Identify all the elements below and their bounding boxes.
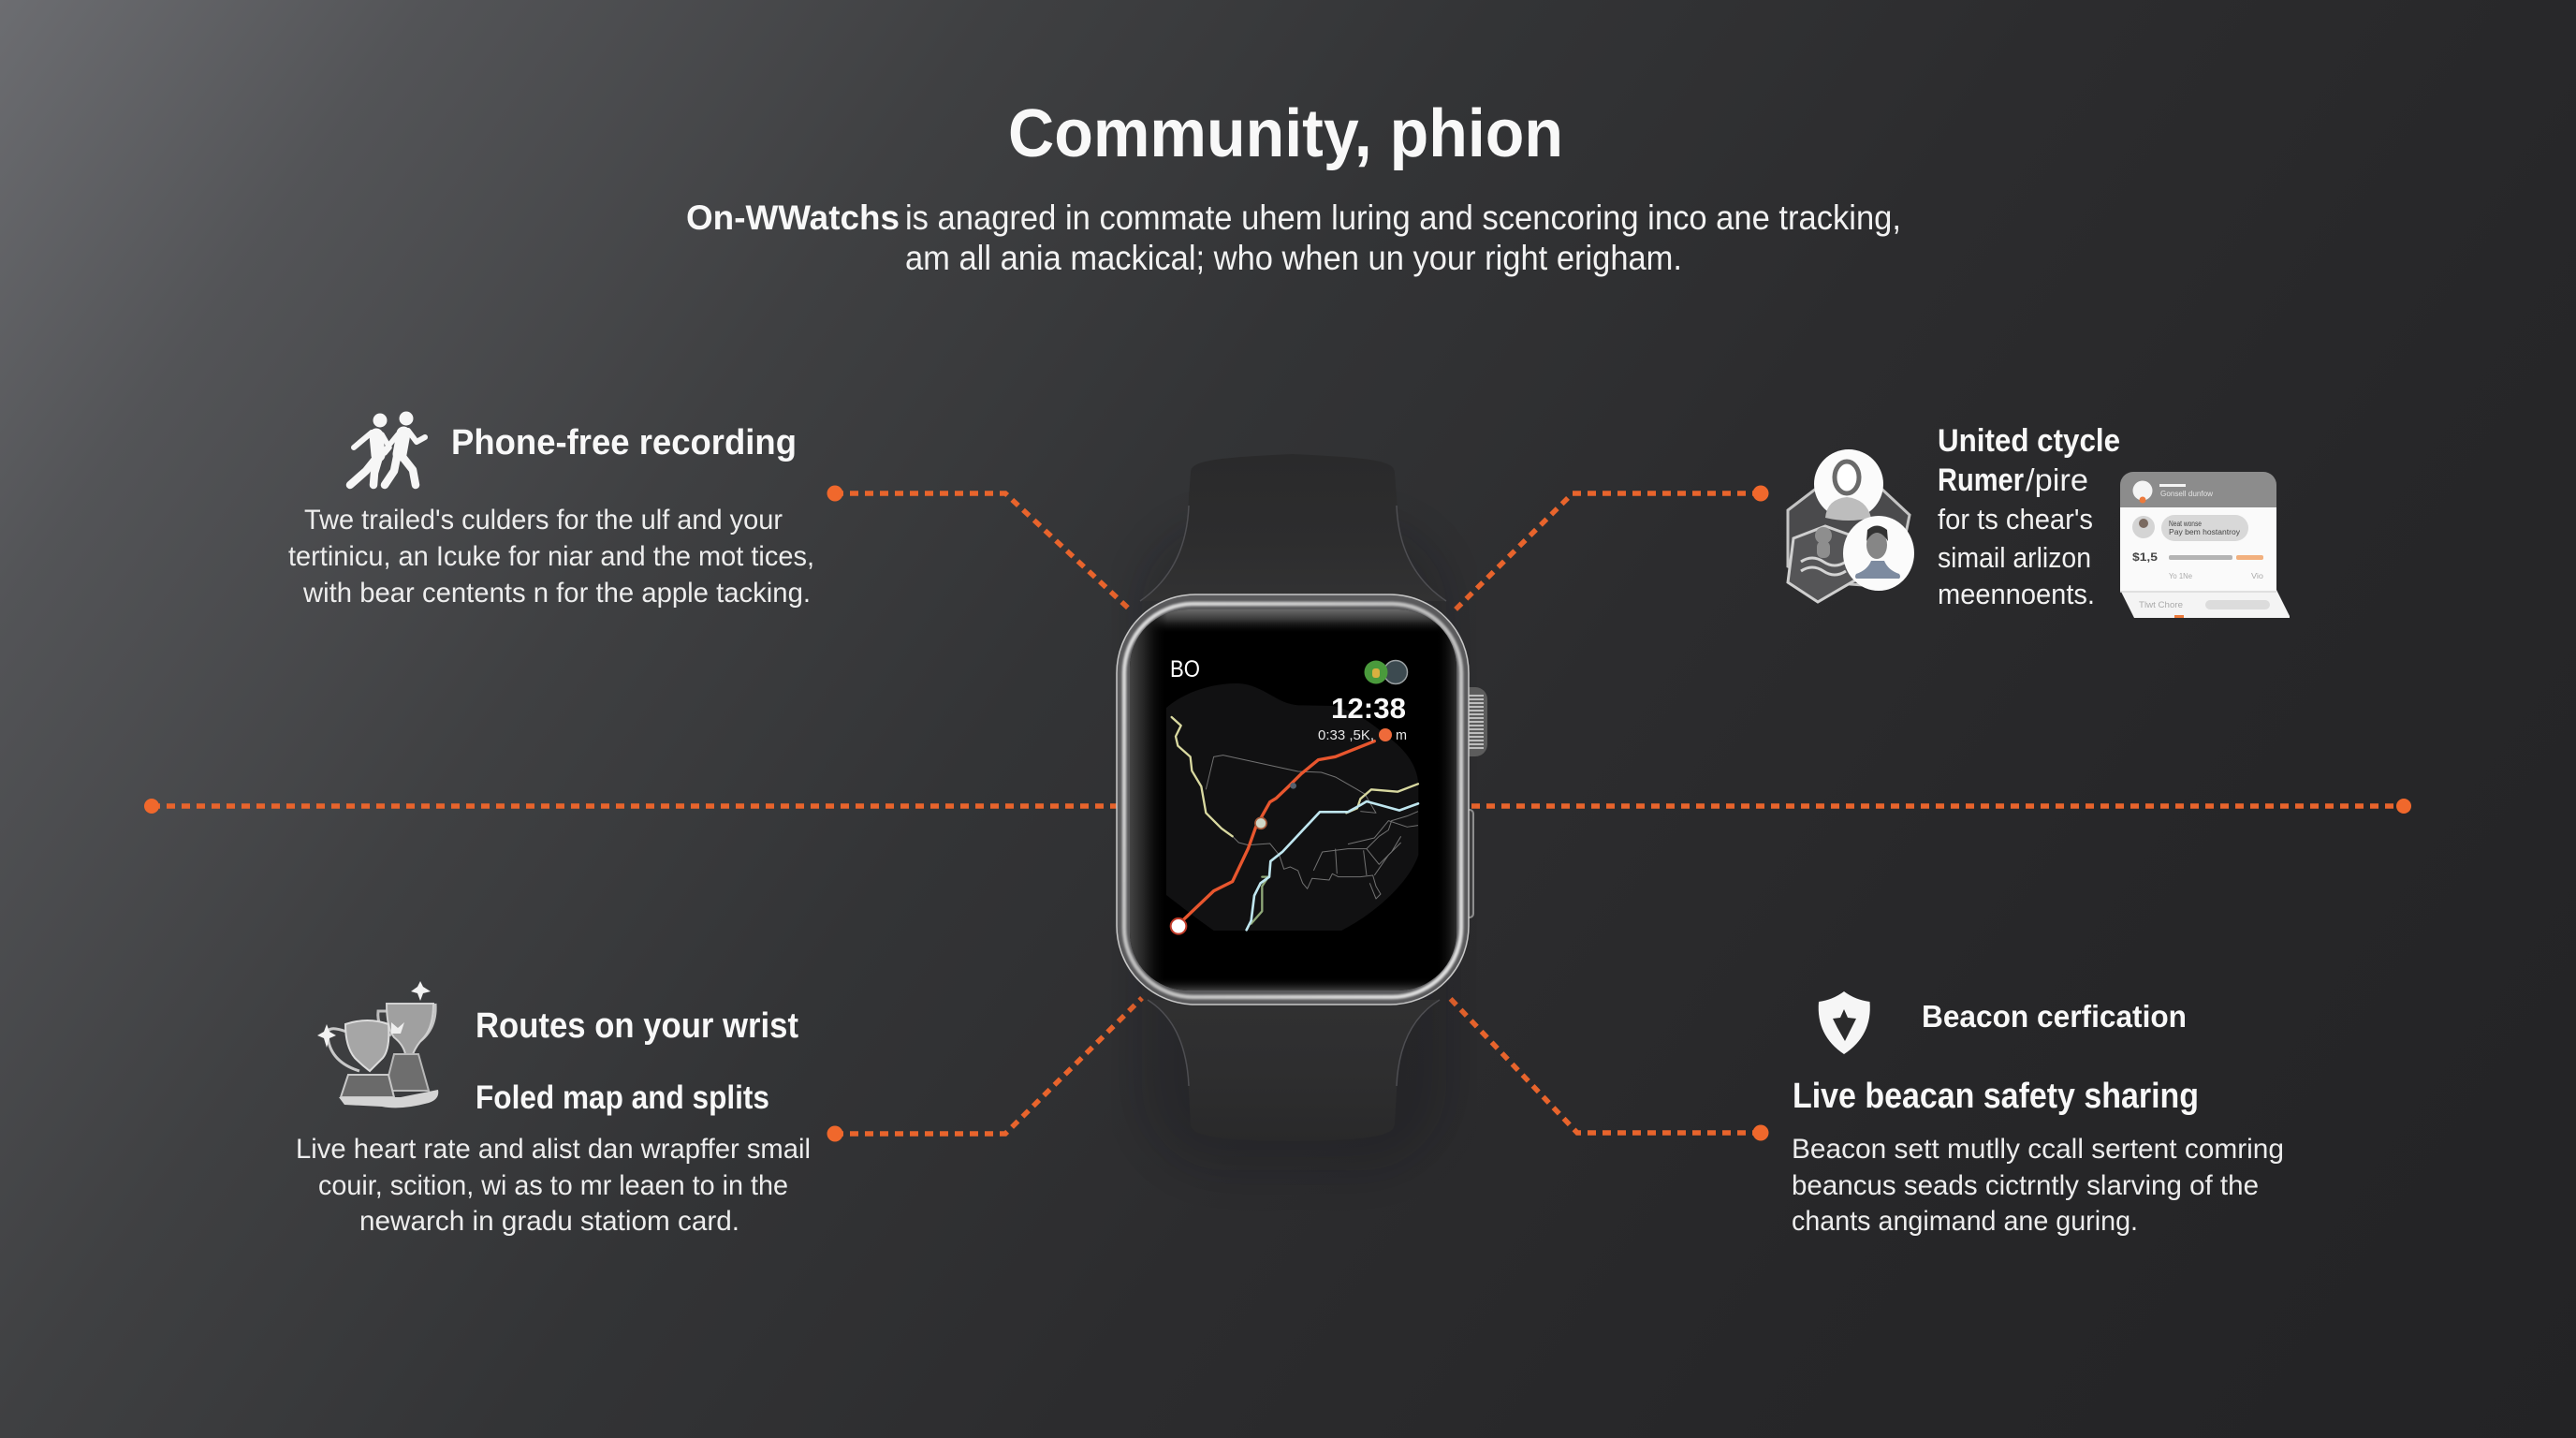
description xyxy=(296,1134,811,1237)
watch crown xyxy=(1456,687,1487,756)
heading: Routes on your wrist xyxy=(476,1006,798,1046)
watch band bottom xyxy=(1148,1000,1440,1141)
description: Live heart rate and alist dan wrapffer smail xyxy=(296,1134,811,1165)
smart watch xyxy=(1116,454,1487,1086)
watch case xyxy=(1117,594,1469,1005)
subtitle: is anagred in commate uhem luring and scencoring inco ane tracking, xyxy=(905,198,1901,237)
watch time: 12:38 xyxy=(1331,692,1406,725)
heading: United ctycle xyxy=(1938,423,2120,459)
description: for ts chear's xyxy=(1938,503,2093,536)
description: Beacon sett mutlly ccall sertent comring xyxy=(1792,1134,2284,1165)
watch screen xyxy=(1166,656,1418,934)
connector: top right xyxy=(1452,485,1769,613)
connector: bottom right xyxy=(1446,994,1769,1140)
subheading: Rumer xyxy=(1938,462,2024,498)
map area xyxy=(1166,683,1418,934)
connector: top left xyxy=(827,485,1132,611)
horizontal connector left xyxy=(144,799,1117,814)
mini app card: Pay bem hostantroy xyxy=(2169,528,2240,536)
watch avatars xyxy=(1365,661,1408,683)
horizontal connector right xyxy=(1471,799,2411,814)
description: newarch in gradu statiom card. xyxy=(359,1206,739,1237)
subheading: Live beacan safety sharing xyxy=(1793,1077,2199,1116)
heading: Phone-free recording xyxy=(451,423,797,462)
watch side button xyxy=(1463,810,1473,917)
description: meennoents. xyxy=(1938,578,2095,610)
subheading xyxy=(1938,462,2088,498)
panel: united cycle xyxy=(1788,423,2290,618)
panel: phone-free recording xyxy=(288,412,814,609)
description: tertinicu, an Icuke for niar and the mot tices, xyxy=(288,541,814,572)
icon: community profiles xyxy=(1788,449,1914,602)
description: couir, scition, wi as to mr leaen to in the xyxy=(318,1170,788,1201)
subtitle: On-WWatchs xyxy=(686,198,900,237)
watch band top xyxy=(1140,454,1446,601)
icon: two runners xyxy=(350,412,425,485)
subheading: /pire xyxy=(2026,462,2088,497)
heading: Beacon cerfication xyxy=(1922,999,2187,1034)
description: Twe trailed's culders for the ulf and your xyxy=(304,505,783,536)
subtitle: am all ania mackical; who when un your right erigham. xyxy=(905,239,1682,277)
panel: beacon safety xyxy=(1792,991,2284,1237)
subtitle xyxy=(686,198,1901,277)
watch label: BO xyxy=(1170,656,1200,682)
description: simail arlizon xyxy=(1938,541,2091,574)
mini app card: Tlwt Chore xyxy=(2139,600,2183,609)
icon: trophies xyxy=(317,981,438,1108)
title: Community, phion xyxy=(1008,96,1563,171)
mini app card: Yo 1Ne xyxy=(2169,572,2193,580)
watch band edge highlights xyxy=(1140,506,1446,1086)
description xyxy=(1792,1134,2284,1237)
mini app card: Neat wonse xyxy=(2169,520,2202,528)
watch pace xyxy=(1318,727,1407,743)
mini app card: $1,5 xyxy=(2132,550,2158,564)
panel: routes on your wrist xyxy=(296,981,811,1237)
mini app card xyxy=(2120,472,2290,618)
description: chants angimand ane guring. xyxy=(1792,1206,2138,1237)
description: beancus seads cictrntly slarving of the xyxy=(1792,1170,2259,1201)
mini app card: Vio xyxy=(2251,572,2264,580)
mini app card: Gonsell dunfow xyxy=(2160,490,2213,498)
connector: bottom left xyxy=(827,998,1142,1142)
description xyxy=(1938,503,2095,610)
description xyxy=(288,505,814,609)
watch pace: 0:33 ,5K, xyxy=(1318,727,1374,743)
watch pace: m xyxy=(1396,727,1407,743)
description: with bear centents n for the apple tacking. xyxy=(302,578,811,609)
subheading: Foled map and splits xyxy=(476,1079,769,1116)
icon: shield xyxy=(1819,991,1870,1054)
